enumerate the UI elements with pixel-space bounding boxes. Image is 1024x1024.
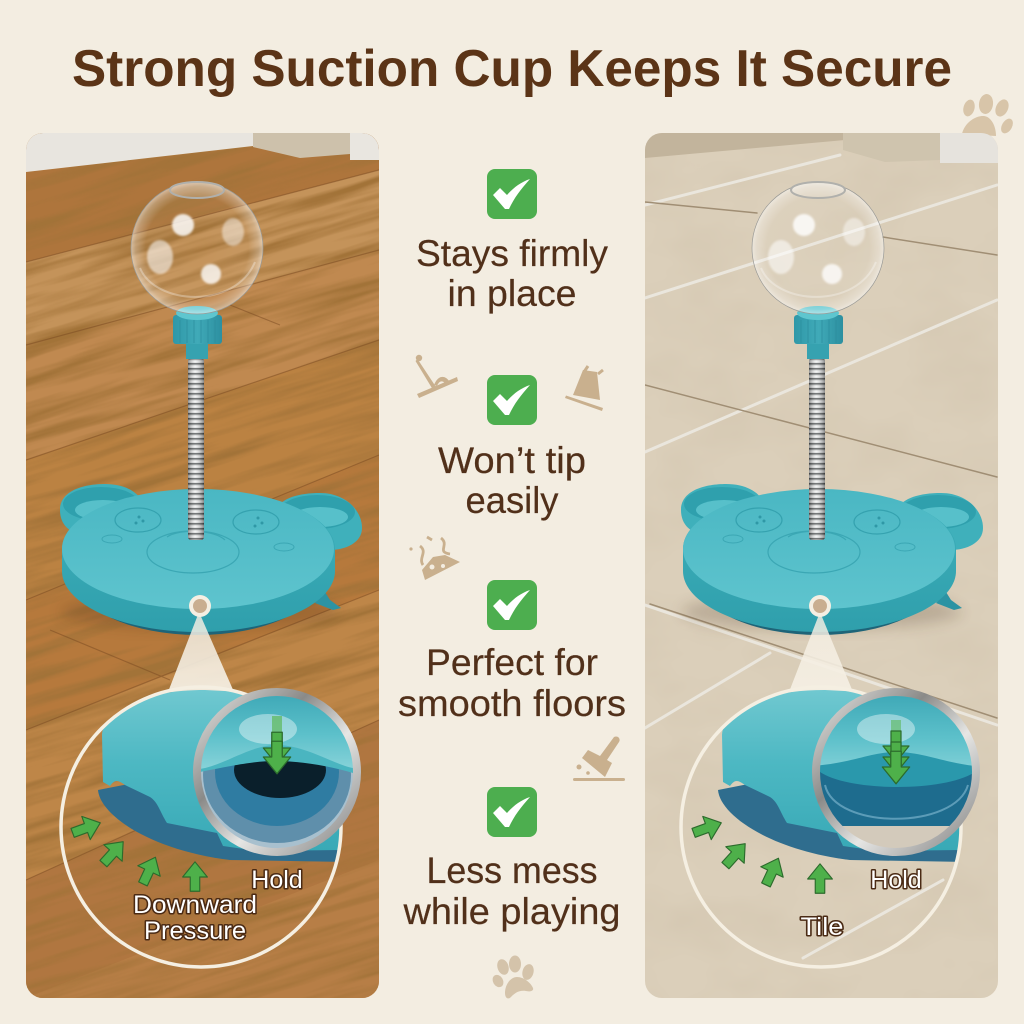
label: Downward Pressure: Pressure bbox=[144, 917, 246, 945]
pressure arrows bbox=[689, 811, 832, 893]
benefit: stays firmly in place: in place bbox=[448, 273, 576, 314]
label: Downward Pressure: Downward bbox=[133, 891, 257, 919]
product: toy on wood bbox=[60, 182, 362, 635]
arrow: press down bbox=[882, 720, 910, 784]
wood planks bbox=[26, 133, 379, 998]
magnifier: suction detail bbox=[190, 688, 365, 852]
label: Hold: Hold bbox=[870, 866, 922, 894]
benefit: stays firmly in place bbox=[416, 169, 608, 314]
icon: mop bbox=[416, 355, 458, 398]
icon: paw top right bbox=[961, 93, 1015, 136]
callout dot bbox=[189, 595, 211, 617]
magnifier: suction detail bbox=[810, 688, 985, 866]
wall bbox=[26, 133, 253, 172]
label: Hold: Hold bbox=[251, 866, 303, 894]
icon: crumbs bbox=[409, 537, 460, 580]
benefit: less mess while playing bbox=[402, 787, 620, 932]
wall bbox=[645, 133, 845, 158]
callout beam bbox=[168, 612, 234, 692]
benefit: won't tip easily bbox=[438, 375, 586, 521]
benefit: less mess while playing: while playing bbox=[402, 891, 620, 932]
label: Tile: Tile bbox=[800, 913, 844, 941]
tile grout lines bbox=[645, 155, 997, 958]
product: toy on tile bbox=[681, 182, 983, 635]
benefit: won't tip easily: Won’t tip bbox=[438, 440, 586, 481]
benefit: perfect for smooth floors: Perfect for bbox=[426, 642, 598, 683]
pressure arrows bbox=[68, 811, 207, 891]
callout dot bbox=[809, 595, 831, 617]
benefit: perfect for smooth floors bbox=[398, 580, 626, 724]
icon: scraper bbox=[573, 736, 625, 781]
panel: wood floor bbox=[26, 133, 379, 998]
zoom circle: tile bbox=[681, 687, 965, 967]
arrow: press down bbox=[263, 716, 291, 774]
benefit: stays firmly in place: Stays firmly bbox=[416, 233, 608, 274]
benefit: less mess while playing: Less mess bbox=[426, 850, 598, 891]
title: Strong Suction Cup Keeps It Secure bbox=[72, 40, 952, 98]
benefit: won't tip easily: easily bbox=[466, 480, 559, 521]
benefit: perfect for smooth floors: smooth floors bbox=[398, 683, 626, 724]
label: Downward Pressure bbox=[134, 894, 257, 940]
callout beam bbox=[790, 616, 852, 692]
icon: paw bottom bbox=[490, 956, 535, 998]
icon: bucket bbox=[565, 366, 603, 411]
zoom circle: wood bbox=[61, 687, 345, 967]
panel: tile floor bbox=[645, 133, 998, 998]
